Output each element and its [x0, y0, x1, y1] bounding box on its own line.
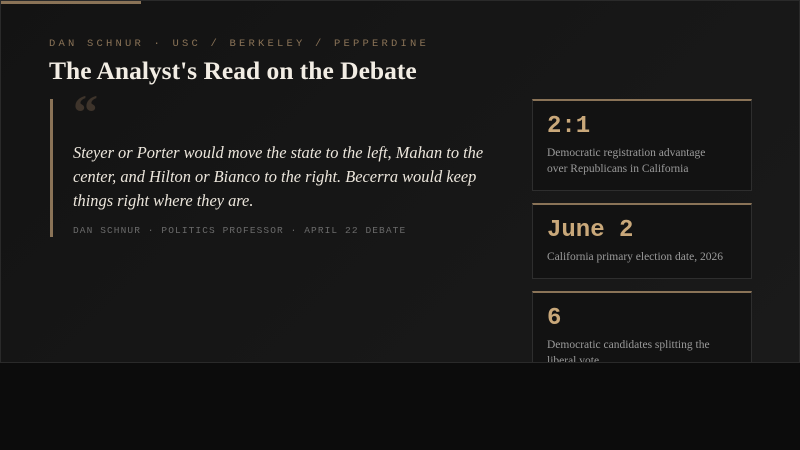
quote text: Steyer or Porter would move the state to the left, Mahan to the center, and Hilton or Bianco to the right. Becerra would keep things right where they are.: [73, 143, 483, 210]
attribution: DAN SCHNUR · POLITICS PROFESSOR · APRIL 22 DEBATE: [73, 225, 406, 236]
stat card: primary date: June 2: [547, 217, 633, 244]
stat card: primary date: [532, 203, 752, 279]
stat card: primary date: California primary election date, 2026: [547, 251, 723, 263]
stat card: registration: Democratic registration advantage over Republicans in California: [547, 147, 705, 175]
stat card: candidates: [532, 291, 752, 383]
stat card: candidates: 6: [547, 305, 561, 332]
kicker: DAN SCHNUR · USC / BERKELEY / PEPPERDINE: [49, 38, 429, 50]
quote block: [50, 99, 500, 237]
icon: quote mark: “: [73, 84, 98, 140]
stat card: registration: [532, 99, 752, 191]
stat card: registration: 2:1: [547, 113, 590, 140]
title: The Analyst's Read on the Debate: [49, 56, 417, 85]
